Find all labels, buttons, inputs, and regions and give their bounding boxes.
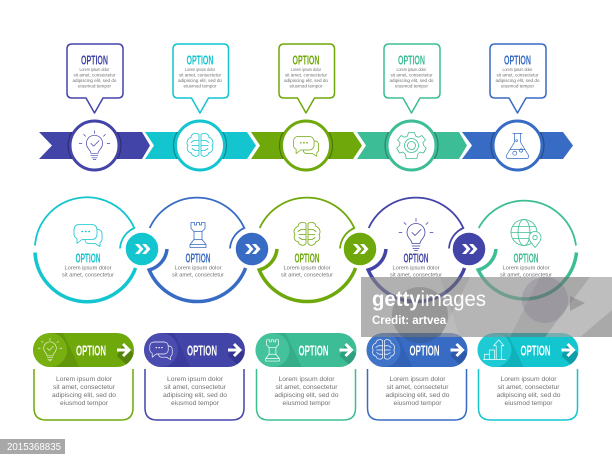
step 4: gear: adipiscing elit, sed do bbox=[390, 78, 434, 83]
circle 1: chat: OPTION bbox=[76, 252, 100, 266]
card 4: blue brain: OPTION bbox=[410, 342, 440, 360]
arrow band 1 bbox=[39, 132, 150, 159]
card 2: purple chat bbox=[144, 333, 245, 421]
step 5: flask: OPTION bbox=[504, 52, 531, 68]
card 3: seafoam rook: eiusmod tempor bbox=[282, 400, 331, 407]
card 4: blue brain: adipiscing elit, sed do bbox=[386, 392, 450, 399]
circle 2: rook: Lorem ipsum dolor bbox=[174, 266, 222, 272]
circle 1: chat: sit amet, consectetur bbox=[62, 272, 114, 278]
card 1: green bulb: eiusmod tempor bbox=[60, 400, 109, 407]
step 1: bulb: Lorem ipsum dolor bbox=[80, 67, 110, 72]
step 1: bulb: eiusmod tempor bbox=[78, 84, 112, 88]
card 1: green bulb: OPTION bbox=[76, 342, 106, 360]
chevron connector 2 bbox=[234, 232, 270, 266]
card 5: teal chart: OPTION bbox=[520, 342, 550, 360]
chevron connector 4 bbox=[452, 232, 486, 266]
card 5: teal chart bbox=[478, 333, 578, 421]
step 3: chat: sit amet, consectetur bbox=[285, 72, 328, 78]
circle 2: rook bbox=[149, 198, 246, 302]
arrow band 4 bbox=[357, 132, 467, 159]
step 3: chat: Lorem ipsum dolor bbox=[291, 67, 321, 72]
circle 5: globe: sit amet, consectetur bbox=[500, 272, 552, 278]
bottom option cards bbox=[33, 333, 592, 420]
circle 2: rook: OPTION bbox=[186, 252, 210, 266]
circle 4: bulb: OPTION bbox=[404, 252, 428, 266]
circle 4: bulb: sit amet, consectetur bbox=[390, 272, 442, 278]
step 5: flask: sit amet, consectetur bbox=[496, 72, 539, 78]
card 2: purple chat: Lorem ipsum dolor bbox=[167, 376, 224, 383]
watermark band bbox=[361, 277, 612, 343]
arrow band 5 bbox=[462, 132, 573, 159]
credit text: Credit: artvea bbox=[372, 315, 447, 327]
circle 4: bulb: Lorem ipsum dolor bbox=[392, 266, 440, 272]
card 3: seafoam rook: OPTION bbox=[298, 342, 328, 360]
card 2: purple chat: OPTION bbox=[187, 342, 217, 360]
step 3: chat: eiusmod tempor bbox=[290, 84, 323, 88]
card 2: purple chat: adipiscing elit, sed do bbox=[163, 392, 227, 399]
step 2: brain: eiusmod tempor bbox=[184, 84, 217, 88]
card 4: blue brain bbox=[366, 333, 468, 421]
top arrow timeline bbox=[39, 44, 573, 170]
card 3: seafoam rook: adipiscing elit, sed do bbox=[274, 392, 339, 399]
step 5: flask: eiusmod tempor bbox=[501, 84, 535, 88]
step 4: gear: sit amet, consectetur bbox=[390, 72, 433, 78]
card 1: green bulb: Lorem ipsum dolor bbox=[56, 376, 113, 383]
circle 1: chat bbox=[35, 197, 136, 302]
circle 3: brain: sit amet, consectetur bbox=[281, 272, 333, 278]
card 3: seafoam rook: sit amet, consectetur bbox=[276, 384, 338, 391]
middle circular process bbox=[35, 197, 576, 302]
step 4: gear: Lorem ipsum dolor bbox=[396, 67, 427, 72]
image id tag: 2015368835 bbox=[7, 442, 61, 453]
card 4: blue brain: eiusmod tempor bbox=[394, 400, 442, 407]
card 1: green bulb: adipiscing elit, sed do bbox=[52, 392, 116, 399]
step 2: brain: OPTION bbox=[186, 52, 214, 68]
step 1: bulb: sit amet, consectetur bbox=[74, 72, 116, 78]
circle 4: bulb bbox=[368, 198, 465, 302]
circle 5: globe bbox=[478, 201, 576, 299]
circle 5: globe: OPTION bbox=[514, 252, 538, 266]
card 2: purple chat: eiusmod tempor bbox=[171, 400, 220, 407]
chevron connector 1 bbox=[124, 232, 160, 266]
step 2: brain: Lorem ipsum dolor bbox=[185, 67, 215, 72]
card 5: teal chart: eiusmod tempor bbox=[504, 400, 553, 407]
card 5: teal chart: sit amet, consectetur bbox=[498, 384, 560, 391]
card 5: teal chart: Lorem ipsum dolor bbox=[500, 376, 557, 383]
step 1: bulb: OPTION bbox=[81, 52, 108, 68]
card 2: purple chat: sit amet, consectetur bbox=[164, 384, 227, 391]
step 1: bulb: adipiscing elit, sed do bbox=[72, 78, 117, 83]
getty logo text: gettyimages bbox=[372, 288, 486, 311]
card 1: green bulb bbox=[33, 333, 134, 421]
circle 3: brain: OPTION bbox=[294, 252, 320, 266]
arrow band 2 bbox=[145, 132, 256, 159]
step 5: flask bbox=[490, 44, 546, 170]
card 4: blue brain: Lorem ipsum dolor bbox=[390, 376, 446, 383]
step 1: bulb bbox=[67, 44, 123, 170]
step 4: gear: OPTION bbox=[398, 52, 425, 68]
card 1: green bulb: sit amet, consectetur bbox=[53, 384, 116, 391]
card 3: seafoam rook bbox=[256, 333, 356, 421]
step 2: brain bbox=[173, 44, 228, 170]
circle 3: brain bbox=[259, 198, 356, 302]
chevron connector 3 bbox=[342, 232, 378, 266]
circle 2: rook: sit amet, consectetur bbox=[172, 272, 224, 278]
card 4: blue brain: sit amet, consectetur bbox=[386, 384, 449, 391]
card 3: seafoam rook: Lorem ipsum dolor bbox=[278, 376, 335, 383]
step 3: chat: adipiscing elit, sed do bbox=[284, 78, 329, 83]
step 2: brain: sit amet, consectetur bbox=[179, 72, 222, 78]
circle 5: globe: Lorem ipsum dolor bbox=[502, 266, 550, 272]
step 4: gear: eiusmod tempor bbox=[395, 84, 429, 88]
step 5: flask: Lorem ipsum dolor bbox=[502, 67, 533, 72]
step 3: chat bbox=[279, 44, 334, 170]
circle 3: brain: Lorem ipsum dolor bbox=[284, 266, 331, 272]
arrow band 3 bbox=[251, 132, 362, 159]
image id tag bbox=[0, 439, 65, 454]
step 3: chat: OPTION bbox=[292, 52, 320, 68]
step 5: flask: adipiscing elit, sed do bbox=[496, 78, 540, 83]
circle 1: chat: Lorem ipsum dolor bbox=[64, 266, 112, 272]
step 4: gear bbox=[384, 44, 440, 170]
card 5: teal chart: adipiscing elit, sed do bbox=[496, 392, 561, 399]
step 2: brain: adipiscing elit, sed do bbox=[178, 78, 223, 83]
